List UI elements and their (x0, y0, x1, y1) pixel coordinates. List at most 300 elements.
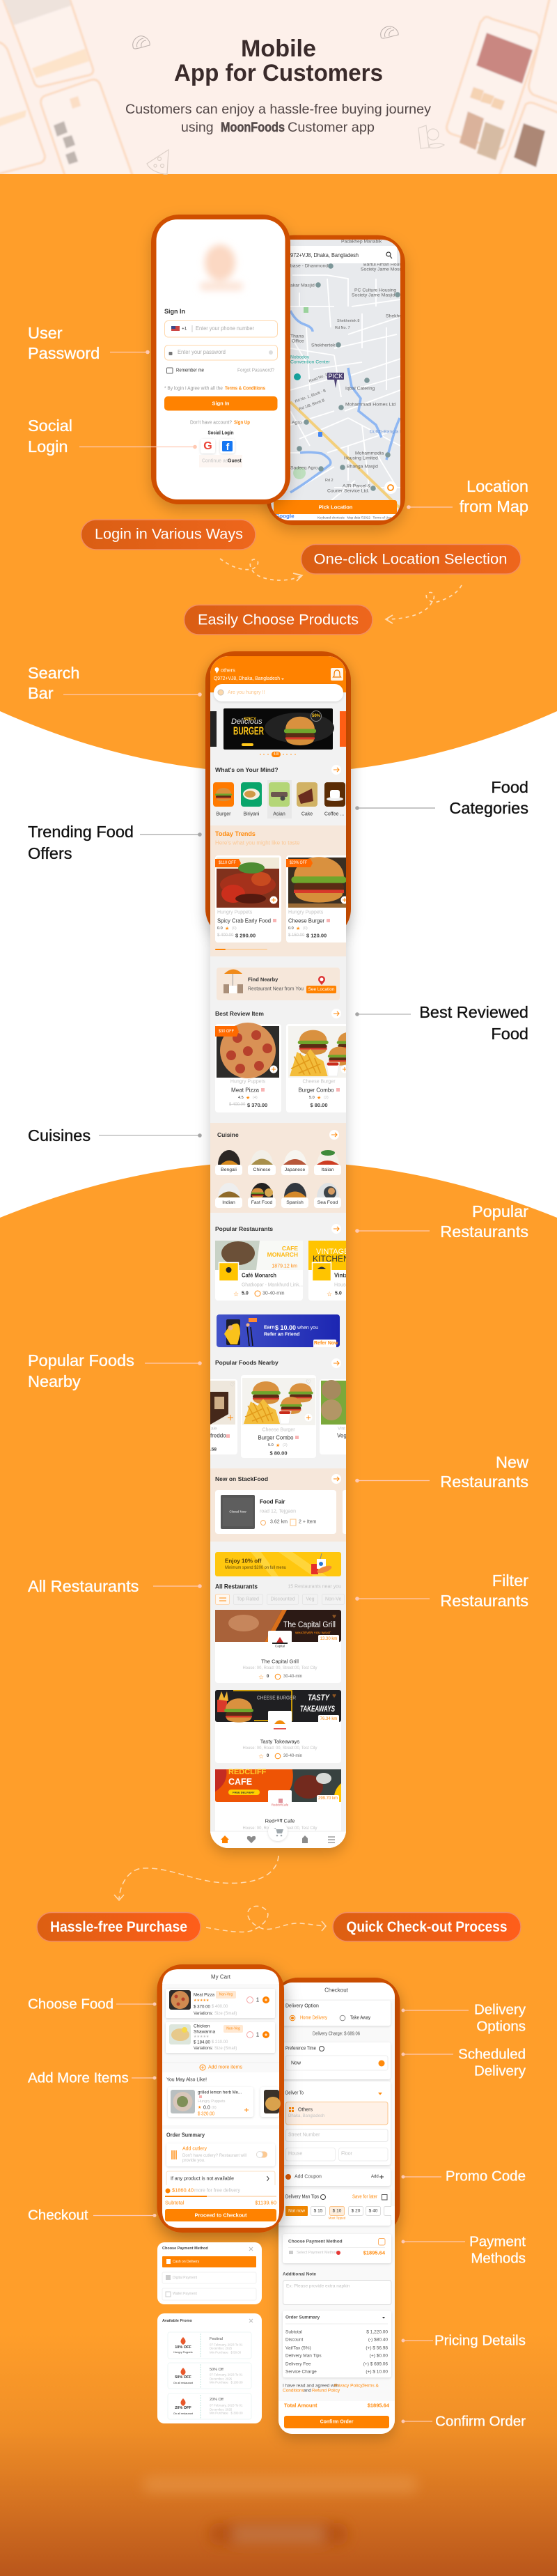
food card: Cheese Burger: 0.0 (288, 926, 294, 931)
cuisine: Japanese: Japanese (285, 1167, 305, 1172)
label: User Password: Password (28, 344, 100, 362)
connector: pricing (401, 2339, 433, 2342)
cart item: Chicken Shawarma: $ 184.80 (194, 2040, 210, 2045)
coupon: 50% off: On all restaurant (173, 2382, 194, 2384)
cart item: Chicken Shawarma (166, 2022, 275, 2053)
button: Proceed to Checkout (165, 2209, 276, 2221)
restaurant card: Cafe Monarch: 1879.12 km (272, 1264, 297, 1269)
app header: Q972+VJ8, Dhaka, Bangladesh (214, 676, 280, 681)
restaurant card: Tasty Takeaways (215, 1690, 341, 1763)
terms text: I have read and agreed with (283, 2384, 339, 2388)
category: burger: Burger (216, 812, 231, 816)
cuisine: Chinese: Chinese (253, 1167, 271, 1172)
coupon: 10% off: Min Purchase $ 50.00 (210, 2350, 242, 2354)
map: Dutch-Bangla B (370, 429, 403, 435)
pill: Hassle-free Purchase (37, 1913, 201, 1941)
suggested item: grilled lemon herb: Hungry Puppets (198, 2100, 226, 2104)
cart item: Chicken Shawarma: Chicken (194, 2024, 210, 2028)
food card: Meat Pizza: (4) (253, 1096, 258, 1100)
coupon: 50% off: December, 2025 (210, 2377, 233, 2381)
heading: Popular Restaurants: Popular Restaurants (215, 1225, 273, 1232)
map search bar: 972+VJ8, Dhaka, Bangladesh (290, 251, 359, 258)
arrow button (331, 1009, 341, 1018)
coupon: 10% off: December, 2025 (210, 2346, 233, 2350)
terms line: Terms & Conditions (225, 386, 265, 391)
option: wallet payment (162, 2288, 256, 2300)
card: add coupon: Add Coupon (295, 2175, 322, 2179)
coupon: 20% off (168, 2393, 251, 2419)
subtotal: $1139.60 (255, 2200, 276, 2205)
section: Cuisine: Cuisine (217, 1131, 239, 1138)
cart item: Meat Pizza: Non-Veg (219, 1992, 233, 1996)
arrow: purchase to checkout (206, 1906, 326, 1932)
subtitle text: Customer app (288, 120, 375, 135)
category: coffee (324, 782, 345, 816)
section: New on StackFood: road 12, Tejgaon (260, 1509, 296, 1514)
coupon: 10% off: Hungry Puppets (173, 2351, 193, 2354)
food card: Spicy Crab: (0) (232, 926, 237, 931)
total amount: Total Amount (284, 2402, 317, 2409)
section: New on StackFood: 2 + Item (299, 1520, 317, 1524)
card: preference time: Now (291, 2061, 301, 2066)
search bar (214, 684, 343, 701)
heading: Sign In: Sign In (164, 308, 185, 315)
restaurant card: Cafe Monarch (215, 1241, 303, 1301)
food card: Spicy Crab: 0.0 (217, 926, 223, 931)
icon: bag (302, 1836, 308, 1843)
banner: burger promo: Delicious (231, 717, 262, 726)
map: Thana (290, 334, 304, 339)
map: Shekhertek 8 (337, 319, 359, 323)
food card: Alfredo (partial): .58 (210, 1448, 217, 1452)
restaurant card: Cafe Monarch: 5.0 (242, 1291, 249, 1296)
food card: Meat Pizza: 4.5 (238, 1096, 244, 1100)
food card: Alfredo (partial): ale (211, 1427, 217, 1431)
card: order summary: Delivery Fee (285, 2361, 311, 2367)
map search bar (290, 246, 397, 263)
bottom navigation (210, 1822, 346, 1848)
map: Courier Service Ltd. (327, 489, 369, 493)
card: Find Nearby: See Location (308, 987, 335, 992)
map: AJR Parcel & (343, 483, 371, 489)
label: Delivery Options: Delivery (474, 2002, 526, 2017)
label: Promo Code: Promo Code (446, 2168, 526, 2185)
food card: Spicy Crab: Hungry Puppets (217, 910, 253, 915)
terms text: Conditions (283, 2388, 304, 2393)
label: Popular Foods Nearby (28, 1351, 134, 1390)
restaurant card: Tasty Takeaways: 30-40-min (283, 1754, 302, 1758)
section: New on StackFood: 3.62 km (270, 1520, 288, 1524)
map: Shekhertek (311, 343, 336, 348)
label: User Password: User (28, 324, 63, 342)
banner: burger promo: BURGER (233, 726, 264, 737)
card: delivery man tips: Save for later (352, 2194, 378, 2200)
button: Sign In: Sign In (212, 400, 230, 407)
map pin: PICK: PICK (328, 373, 343, 380)
connector: user password (110, 350, 150, 354)
filter chips: Discounted (270, 1597, 295, 1602)
icon: heart (247, 1836, 256, 1843)
label: Confirm Order: Confirm Order (435, 2413, 526, 2430)
food card: Spicy Crab: $110 OFF (219, 861, 236, 865)
category: burger (213, 782, 234, 816)
filter chips: Veg (306, 1597, 315, 1602)
arrow: to one-click location (220, 559, 302, 581)
icon: google (201, 439, 215, 453)
label: Trending Food Offers (28, 823, 134, 862)
food card: Cheese Burger (286, 855, 349, 942)
restaurant card: Tasty Takeaways: TASTY (308, 1693, 330, 1702)
food card: Spicy Crab (215, 855, 281, 942)
food categories (213, 780, 345, 818)
label: Location from Map: Location (466, 477, 528, 495)
suggested item: grilled lemon herb: 0.0 (203, 2105, 210, 2111)
heading: All Restaurants: 15 Restaurants near you (288, 1584, 341, 1590)
button: Confirm Order (284, 2416, 389, 2428)
card: order summary: (+) $ 689.06 (363, 2361, 388, 2367)
phone number field: Enter your phone number (196, 325, 254, 332)
arrow: from main phone to purchase (114, 1856, 278, 1900)
restaurant card: Tasty Takeaways: ♥ (332, 1693, 336, 1700)
card: payment method: Select Payment Method (297, 2251, 337, 2255)
option: wallet payment: Wallet Payment (173, 2292, 197, 2296)
phone: home screen (205, 651, 365, 1848)
card: order summary: Vat/Tax (5%) (285, 2346, 311, 2350)
coupon: 20% off: 20% OFF (175, 2406, 191, 2410)
food card: Burger Combo (286, 1024, 346, 1112)
map: Rd 2 (325, 479, 334, 483)
cart item: Meat Pizza: Variations: (194, 2012, 213, 2016)
banner: refer a friend: Refer Now (314, 1341, 338, 1346)
food card: Veg (partial) (320, 1379, 351, 1454)
heading: All Restaurants: All Restaurants (215, 1583, 258, 1591)
food card: Burger Combo (center): (2) (283, 1443, 288, 1448)
free delivery progress (165, 2189, 276, 2197)
connector: scheduled (401, 2052, 453, 2056)
subtitle text (125, 102, 431, 135)
card: payment method: Choose Payment Method (288, 2239, 343, 2244)
modal: available promo: Available Promo (162, 2319, 193, 2323)
terms text: and (304, 2388, 311, 2393)
label: Search Bar: Search (28, 664, 79, 682)
restaurant card: Vintage Kitchen: 5.0 (335, 1291, 342, 1296)
food card: Meat Pizza: $30 OFF (219, 1030, 234, 1034)
restaurant card: Vintage Kitchen: Vintage (334, 1272, 354, 1279)
phone: my cart screen (157, 1964, 284, 2233)
subtitle text: using (181, 120, 214, 135)
label: Checkout: Checkout (28, 2207, 88, 2224)
option: digital payment (162, 2272, 256, 2283)
restaurant card: Tasty Takeaways: 0 (267, 1754, 269, 1758)
restaurant card: Redcliff Cafe: CAFE (228, 1777, 252, 1787)
label: Popular Foods Nearby: Popular Foods (28, 1351, 134, 1370)
label: Popular Restaurants: Popular (472, 1202, 528, 1220)
label: Best Reviewed Food: Best Reviewed (419, 1003, 528, 1021)
label: Location from Map (460, 477, 528, 515)
cuisine: Italian (314, 1150, 341, 1175)
food card: Cheese Burger: Hungry Puppets (288, 910, 324, 915)
connector: search (63, 692, 202, 697)
label: Delivery Options (474, 2002, 526, 2034)
coupon: 50% off: 50% Off (210, 2368, 223, 2372)
cuisine: Italian: Italian (321, 1167, 334, 1172)
label: Social Login (28, 417, 72, 456)
map: Iqbal Catering (345, 386, 375, 391)
label: Food Categories: Categories (449, 799, 528, 817)
food card: Spicy Crab: Spicy Crab Early Food (217, 918, 271, 924)
connector: all restaurants (153, 1584, 202, 1588)
food card: Burger Combo (center): Cheese Burger (262, 1428, 295, 1432)
section: New on StackFood: New on StackFood (215, 1475, 268, 1482)
pill: One-click Location Selection (301, 545, 521, 574)
food card: Burger Combo (center): ♡ (306, 1379, 311, 1386)
restaurant card: Tasty Takeaways: ☆ (258, 1753, 264, 1760)
connector: promo code (401, 2175, 441, 2179)
connector: popular foods (145, 1361, 202, 1365)
label: Best Reviewed Food: Food (491, 1025, 528, 1043)
password field: Enter your password (178, 349, 226, 355)
restaurant card: Redcliff Cafe: House: 00, Road: 00, Street:00, Test City (242, 1826, 317, 1831)
food card: Burger Combo: Burger Combo (298, 1087, 334, 1094)
food card: Meat Pizza: $ 370.00 (247, 1102, 267, 1108)
map (271, 240, 404, 520)
map: Mohammadia (355, 451, 384, 456)
card: payment method (283, 2234, 391, 2263)
label: Choose Food: Choose Food (28, 1996, 113, 2012)
restaurant card: The Capital Grill: 13.30 km (320, 1637, 337, 1641)
phone frame (205, 651, 351, 938)
label: Filter Restaurants: Filter (492, 1572, 528, 1590)
restaurant card: Tasty Takeaways: CHEESE BURGER (257, 1694, 297, 1701)
restaurant card: The Capital Grill: WHATEVER YOU WANT (295, 1631, 331, 1634)
heading: Popular Foods Nearby: Popular Foods Nearby (215, 1359, 278, 1366)
pill: One-click Location Selection: One-click Location Selection (313, 552, 507, 567)
category: asian (269, 782, 290, 816)
icon: facebook (220, 439, 235, 453)
coupon: 50% off: 07 February, 2023 To 01 (210, 2373, 243, 2377)
food card: Cheese Burger: $ 120.00 (306, 932, 327, 939)
restaurant card: Vintage Kitchen: ☆ (327, 1290, 332, 1297)
map: Bhanga Masjid (347, 464, 378, 470)
connector: cuisines (99, 1133, 202, 1138)
food card: Meat Pizza: Meat Pizza (231, 1087, 260, 1094)
restaurant card: The Capital Grill: ☆ (258, 1673, 264, 1680)
suggested item: grilled lemon herb (168, 2087, 253, 2117)
heading: All Restaurants (215, 1583, 341, 1591)
subtotal: Subtotal (165, 2200, 185, 2205)
continue as guest: Guest (228, 458, 242, 464)
cart item: Chicken Shawarma: Size (Small) (214, 2047, 237, 2051)
food card: Cheese Burger: $20% OFF (290, 861, 307, 865)
food card: Burger Combo (center): $ 80.00 (269, 1450, 288, 1456)
coupon: 50% off (168, 2363, 251, 2389)
food card: Meat Pizza: Hungry Puppets (230, 1080, 266, 1084)
restaurant card: Cafe Monarch: Ghatkopar - Mankhurd Link... (242, 1283, 303, 1287)
map: Sadeeq Agro (290, 465, 318, 471)
coupon: 10% off: 10% OFF (175, 2345, 191, 2350)
card: add coupon: Add (371, 2175, 379, 2179)
title: Mobile (241, 36, 316, 62)
map: PC Culture Housing (354, 288, 396, 293)
label: Scheduled Delivery (458, 2047, 526, 2079)
card: order summary (283, 2311, 391, 2377)
total amount: $1895.64 (368, 2402, 390, 2409)
cuisine: Fast Food (248, 1183, 276, 1208)
app header: others (221, 667, 235, 673)
food card: Cheese Burger: $ 150.00 (288, 933, 305, 938)
label: User Password (28, 324, 100, 362)
restaurant card: Tasty Takeaways: 76.34 km (320, 1717, 337, 1721)
label: Payment Methods: Payment (469, 2233, 526, 2250)
card: preference time (276, 2042, 391, 2079)
restaurant card: Cafe Monarch: Café Monarch (242, 1272, 276, 1279)
label: Social Login: Social (28, 417, 72, 435)
map: akar Masjid (290, 283, 315, 288)
label: Food Categories (449, 778, 528, 817)
button: Confirm Order: Confirm Order (320, 2420, 354, 2424)
banner: refer a friend: $ 10.00 (275, 1324, 296, 1331)
card: Find Nearby: Restaurant Near from You (248, 986, 304, 992)
coupon: 20% off: December, 2025 (210, 2407, 233, 2412)
pill: Login in Various Ways: Login in Various Ways (95, 527, 243, 542)
phone: sign in screen (151, 215, 290, 504)
card: order summary: Subtotal (285, 2329, 302, 2335)
card: payment method: $1895.64 (363, 2250, 386, 2256)
selected address: Others (298, 2108, 313, 2112)
label: Scheduled Delivery: Scheduled (458, 2047, 526, 2062)
arrow button (331, 765, 341, 775)
label: Location from Map: from Map (460, 497, 528, 515)
map: Agro (292, 421, 302, 425)
cuisine: Indian: Indian (222, 1200, 235, 1205)
label: Search Bar: Bar (28, 684, 54, 702)
restaurant card: The Capital Grill: Capital (275, 1644, 285, 1648)
map pin: PICK (327, 373, 344, 388)
food card: Veg (partial): Veg (337, 1432, 347, 1439)
card: order summary: (+) $ 10.00 (366, 2370, 388, 2374)
restaurant card: The Capital Grill (215, 1610, 341, 1683)
card: deliver to: Deliver To (285, 2091, 304, 2095)
cart item: Chicken Shawarma: ★★★★★ (194, 2035, 210, 2039)
cart item: Meat Pizza: Size (Small) (214, 2012, 237, 2016)
card: delivery option: Home Delivery (300, 2016, 327, 2020)
restaurant card: Redcliff Cafe: Redcliff Cafe (265, 1818, 295, 1824)
terms text: Refund Policy (312, 2388, 340, 2393)
option: cash on delivery: Cash on Delivery (173, 2260, 200, 2264)
option: digital payment: Digital Payment (173, 2276, 198, 2280)
heading: Best Review Item: Best Review Item (215, 1010, 264, 1017)
connector: location (407, 505, 453, 509)
card: delivery man tips (276, 2189, 393, 2226)
button: Pick Location (274, 500, 397, 514)
label: New Restaurants: New (496, 1453, 529, 1471)
connector: best reviewed (355, 1012, 411, 1016)
map: Google (275, 513, 295, 520)
section: Today Trends (210, 825, 349, 956)
cuisine: Chinese (248, 1150, 276, 1175)
map: Rd No. 7 (335, 326, 350, 330)
heading: Checkout: Checkout (324, 1987, 349, 1994)
option: cash on delivery (162, 2256, 256, 2267)
phone: checkout screen (273, 1978, 400, 2434)
title: App for Customers (174, 60, 383, 86)
connector: delivery options (401, 2009, 469, 2012)
label: New Restaurants: Restaurants (440, 1473, 528, 1491)
food card: Spicy Crab: $ 290.00 (235, 932, 256, 939)
restaurant card: Redcliff Cafe: 299.70 km (318, 1797, 338, 1801)
coupon: 10% off: Festival (210, 2337, 223, 2341)
suggested item: grilled lemon herb: (0) (212, 2106, 217, 2110)
connector: social login (79, 445, 197, 449)
food card: Cheese Burger: Cheese Burger (288, 918, 324, 924)
restaurant card: Cafe Monarch: ☆ (233, 1290, 239, 1297)
cuisine: Bengali: Bengali (221, 1167, 237, 1172)
heading: You May Also Like: You May Also Like! (166, 2076, 207, 2083)
coupon: 50% off: 50% OFF (175, 2375, 191, 2380)
map: Nobodoy (290, 355, 310, 359)
pill: Easily Choose Products: Easily Choose Products (198, 612, 359, 628)
panel: white curved band behind main phone (0, 711, 557, 1218)
connector: payment (401, 2240, 465, 2243)
pill: Login in Various Ways (81, 520, 256, 550)
title (174, 36, 383, 86)
connector: filter restaurants (355, 1597, 430, 1601)
label: Scheduled Delivery: Delivery (474, 2063, 526, 2079)
food card: Alfredo (partial): ♡ (230, 1382, 235, 1388)
restaurant card: Cafe Monarch: CAFE (282, 1245, 298, 1252)
search bar: Are you hungry !! (228, 690, 265, 695)
food card: Burger Combo (center): Burger Combo (258, 1435, 294, 1441)
blurred footer button (209, 2523, 348, 2545)
unavailable product option (166, 2171, 275, 2185)
suggested item: grilled lemon herb: grilled lemon herb Me... (198, 2090, 242, 2095)
coupon: 50% off: Min Purchase $ 100.00 (210, 2381, 243, 2384)
blurred logo (200, 245, 243, 290)
terms line: * By login I Agree with all the (164, 386, 223, 391)
card: delivery man tips: $ 10 (333, 2208, 342, 2214)
restaurant card: The Capital Grill: House: 00, Road: 00, Street:00, Test City (242, 1666, 317, 1670)
category: cake: Cake (301, 812, 313, 816)
label: Payment Methods (469, 2233, 526, 2267)
total amount (284, 2402, 390, 2409)
food card: Meat Pizza: ★ (246, 1095, 250, 1101)
note field: Ex: Please provide extra napkin (286, 2283, 350, 2289)
map: Society Jame Mosq (361, 267, 402, 272)
label: Food Categories: Food (491, 778, 528, 796)
card: order summary: (-) $80.40 (368, 2338, 388, 2342)
label: Filter Restaurants (440, 1572, 528, 1610)
cart item: Meat Pizza: $ 400.00 (212, 2005, 228, 2009)
restaurant card: Vintage Kitchen (308, 1241, 354, 1301)
map: Housing Limited (344, 456, 378, 461)
coupon: 10% off (168, 2332, 251, 2359)
card: deliver to: Floor (341, 2151, 353, 2157)
panel: header background (0, 0, 557, 174)
add cutlery card (166, 2143, 275, 2166)
icon: grocery doodle (418, 125, 444, 148)
restaurant card: Vintage Kitchen: VINTAGE (316, 1248, 349, 1256)
cuisine: Spanish: Spanish (286, 1200, 304, 1205)
heading: What's on Your Mind?: What's on Your Mind? (215, 766, 278, 773)
banner: refer a friend: Refer an Friend (264, 1332, 299, 1337)
card: delivery man tips: Most Tipped (329, 2217, 346, 2219)
cuisine: Bengali (215, 1150, 242, 1175)
cart item: Chicken Shawarma: $ 210.00 (212, 2040, 228, 2044)
cart item: Chicken Shawarma: Shawarma (194, 2030, 215, 2034)
header decoration: faded phone mockups (0, 0, 557, 178)
free delivery progress: $1860.40 (172, 2189, 194, 2193)
add cutlery card: Don't have cutlery? Restaurant will (182, 2154, 246, 2158)
